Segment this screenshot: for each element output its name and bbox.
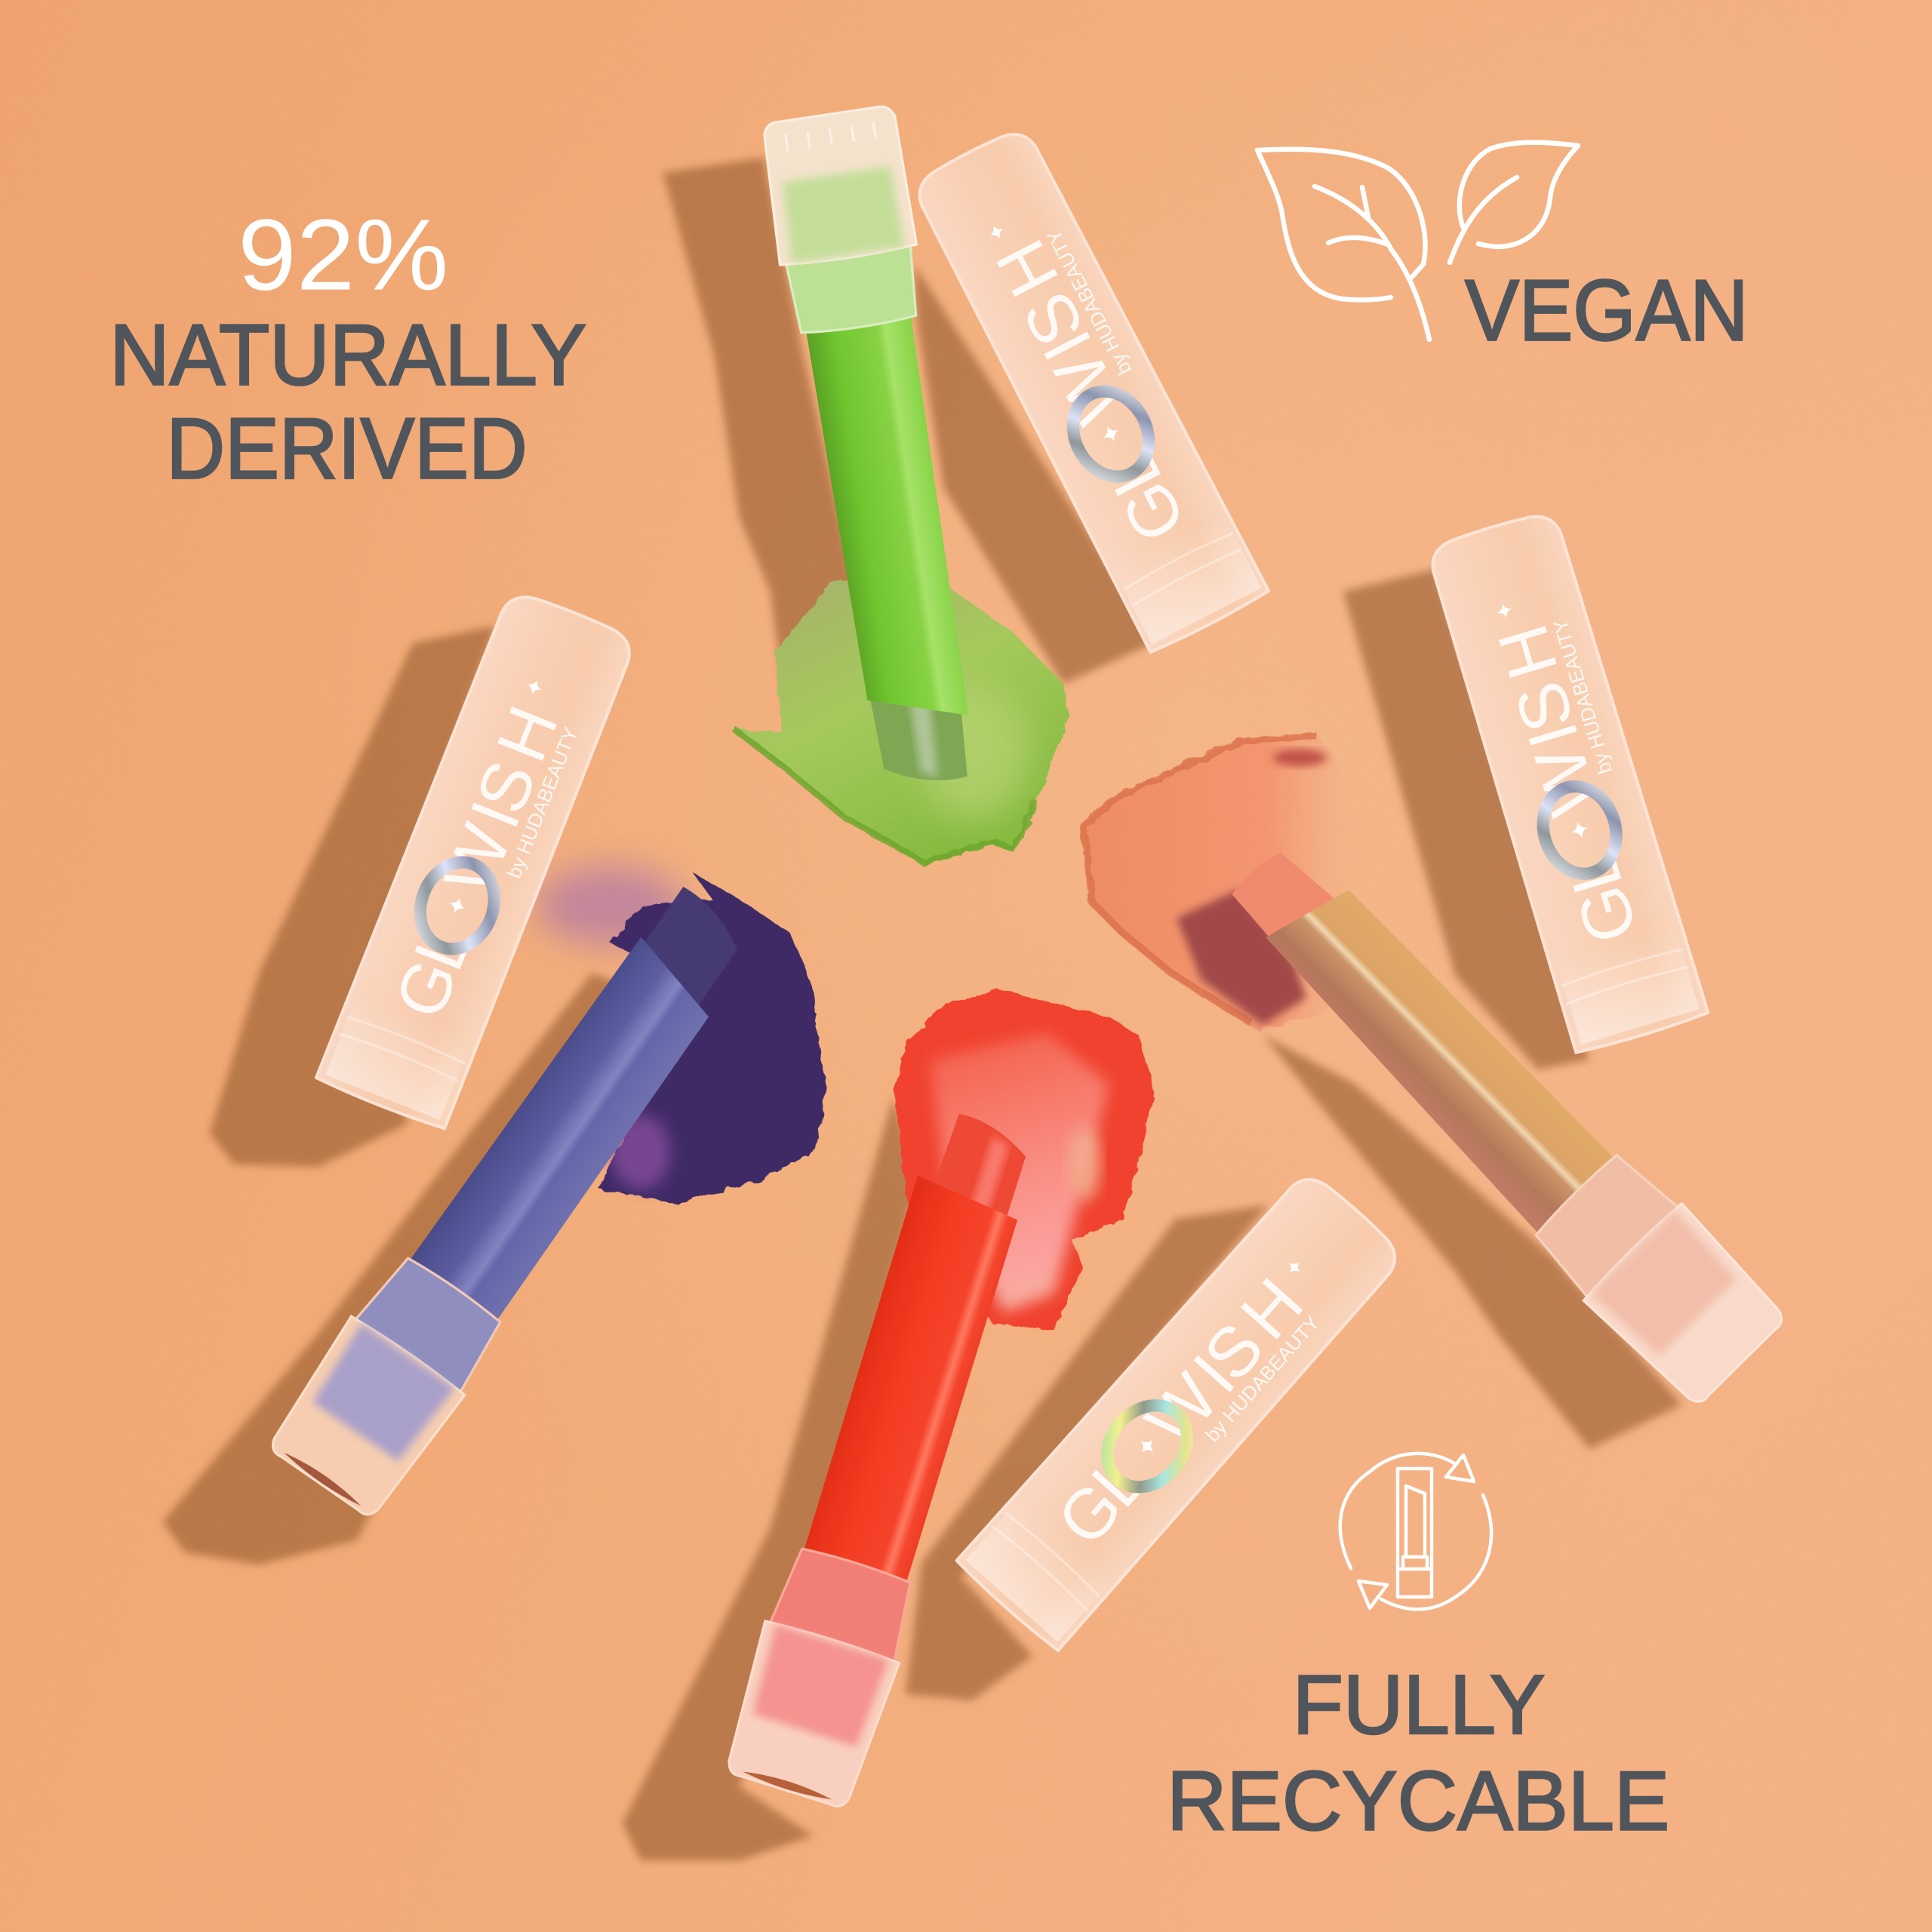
cast shadows [163, 158, 1682, 1860]
cap: right with GLOWISH label: by HUDABEAUTY [1549, 617, 1617, 777]
lipstick: purple [263, 870, 774, 1523]
cap: top with GLOWISH label: by HUDABEAUTY [1042, 226, 1136, 379]
icon: leaves [1257, 143, 1578, 340]
swatch: purple balm [536, 866, 827, 1204]
icon: recycle lipstick [1340, 1454, 1491, 1609]
cap: bottom with GLOWISH label [955, 1166, 1408, 1652]
cap: bottom with GLOWISH label: GLOWISH [1042, 1263, 1318, 1560]
label: fully: FULLY [1293, 1657, 1545, 1752]
cap: left with GLOWISH label: GLOWISH [380, 696, 573, 1029]
stat: 92%: 92% [238, 199, 448, 312]
cap: left with GLOWISH label: by HUDABEAUTY [503, 724, 583, 881]
label: vegan: VEGAN [1465, 263, 1749, 359]
swatch: green balm [732, 579, 1069, 865]
cap: bottom with GLOWISH label: by HUDABEAUTY [1201, 1312, 1324, 1446]
swatch: peach balm [1081, 733, 1364, 1030]
cap: top with GLOWISH label: GLOWISH [980, 228, 1201, 554]
label: naturally: NATURALLY [109, 307, 586, 403]
lipstick: green [759, 104, 995, 793]
text block: fully recyclable [1167, 1657, 1669, 1847]
cap: top with GLOWISH label [908, 123, 1269, 654]
label: recyclable: RECYCABLE [1167, 1753, 1669, 1847]
lipstick: peach nude [1205, 821, 1791, 1411]
label: derived: DERIVED [166, 401, 528, 497]
cap: right with GLOWISH label: GLOWISH [1483, 617, 1652, 952]
text block: 92% naturally derived [109, 199, 586, 497]
lipstick: red [718, 1103, 1061, 1811]
swatch: red balm [894, 989, 1155, 1330]
cap: left with GLOWISH label [315, 587, 638, 1131]
cap: right with GLOWISH label [1423, 508, 1709, 1055]
